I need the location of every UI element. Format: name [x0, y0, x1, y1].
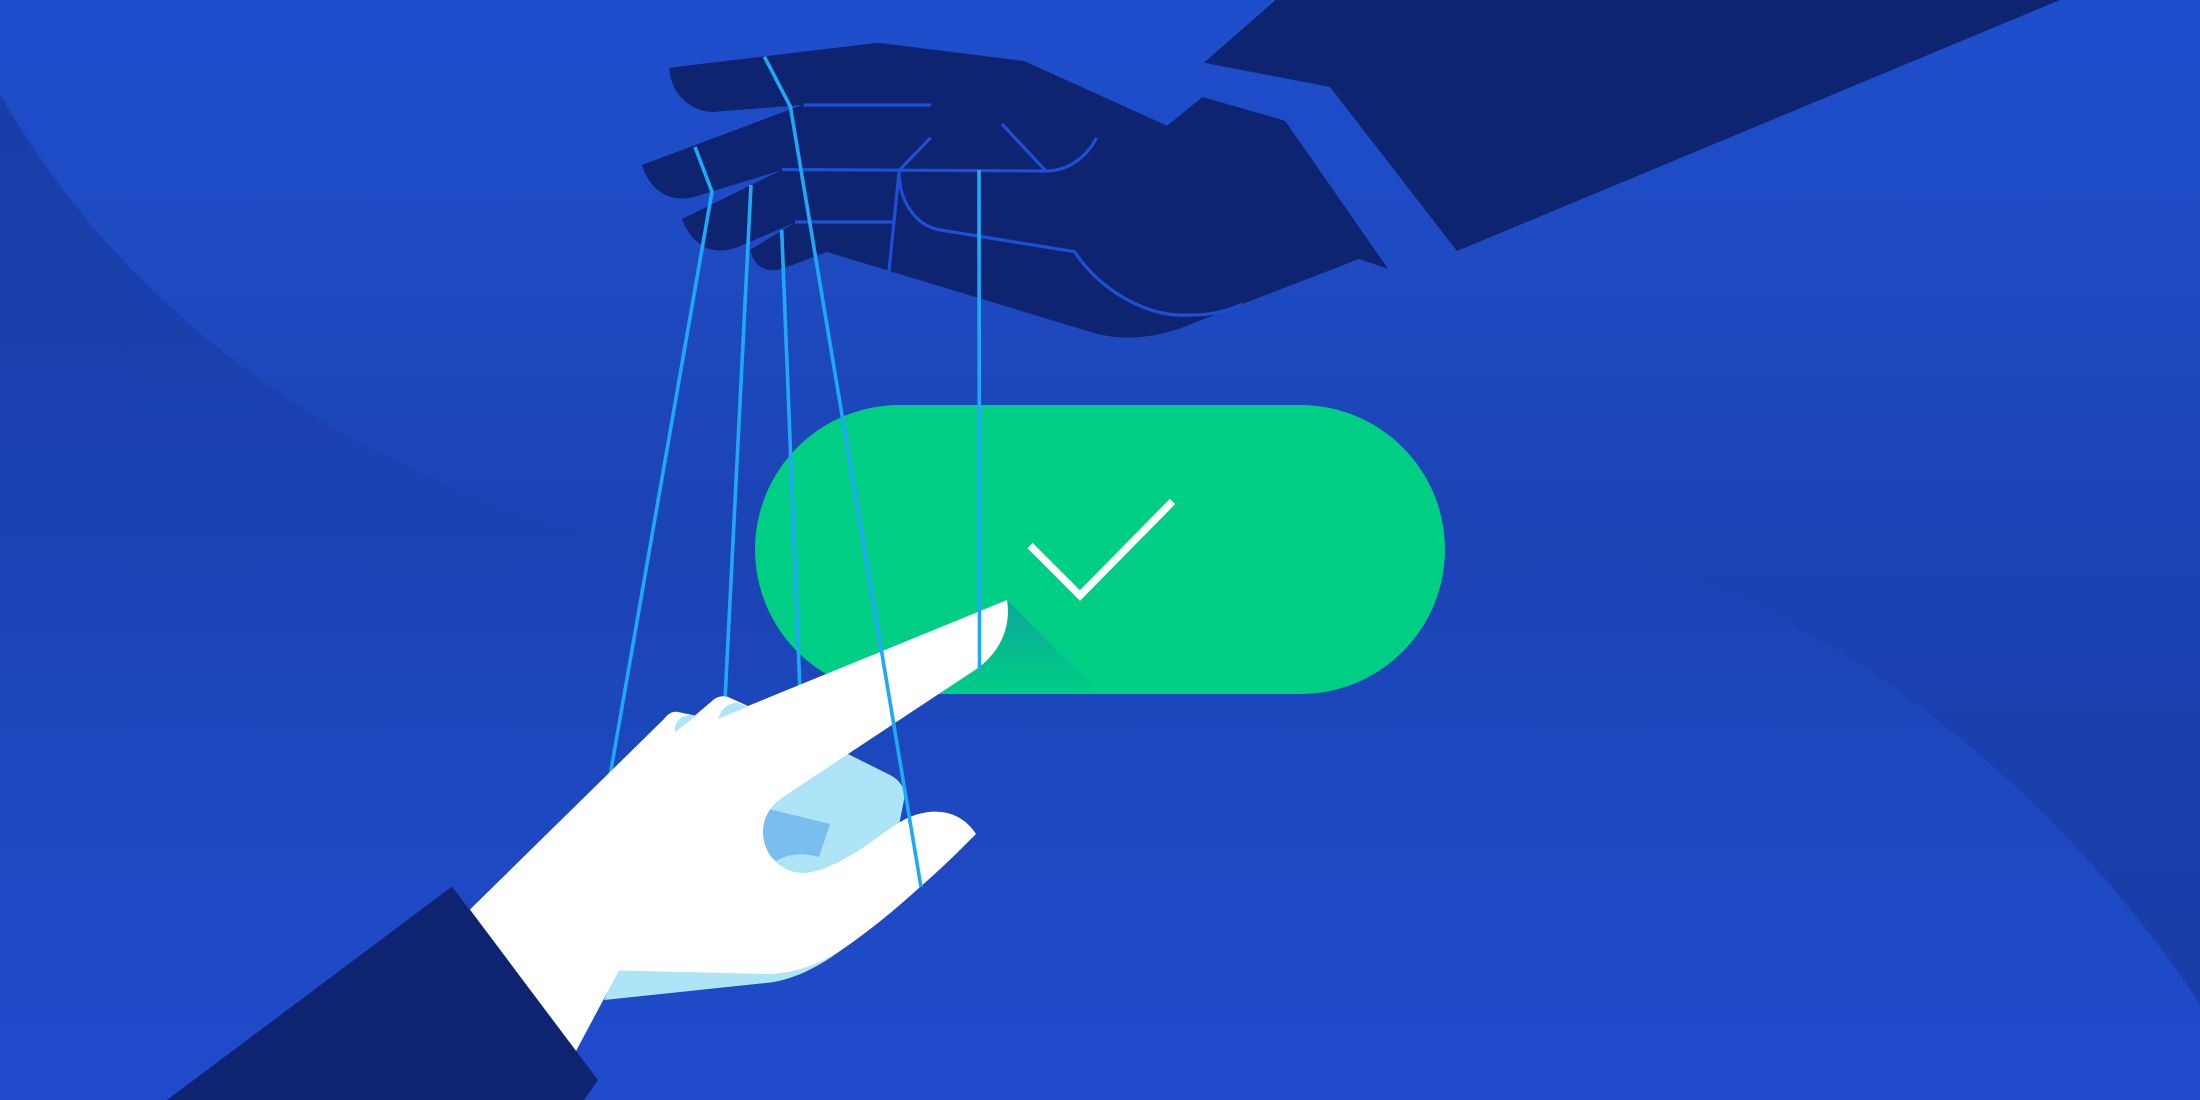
- finger shadow on pill: [930, 600, 1100, 694]
- hand crease lines: [782, 105, 1242, 315]
- white pointing hand: [470, 600, 1008, 1051]
- puppeteer sleeve: [1204, 0, 2060, 251]
- check mark: [1030, 502, 1172, 596]
- right dark arc: [1560, 552, 2200, 1004]
- strings behind hand: [610, 147, 800, 776]
- lower palm shade: [604, 951, 840, 1000]
- strings over hand: [764, 57, 980, 887]
- left dark arc: [0, 94, 860, 565]
- light palm interior: [604, 750, 904, 1000]
- green toggle pill: [755, 405, 1445, 694]
- puppeteer hand: [642, 43, 1388, 338]
- knuckle creases: [675, 703, 748, 732]
- palm shadow patch: [750, 805, 830, 861]
- knuckle crease 2: [718, 703, 748, 719]
- dark cuff: [167, 886, 598, 1100]
